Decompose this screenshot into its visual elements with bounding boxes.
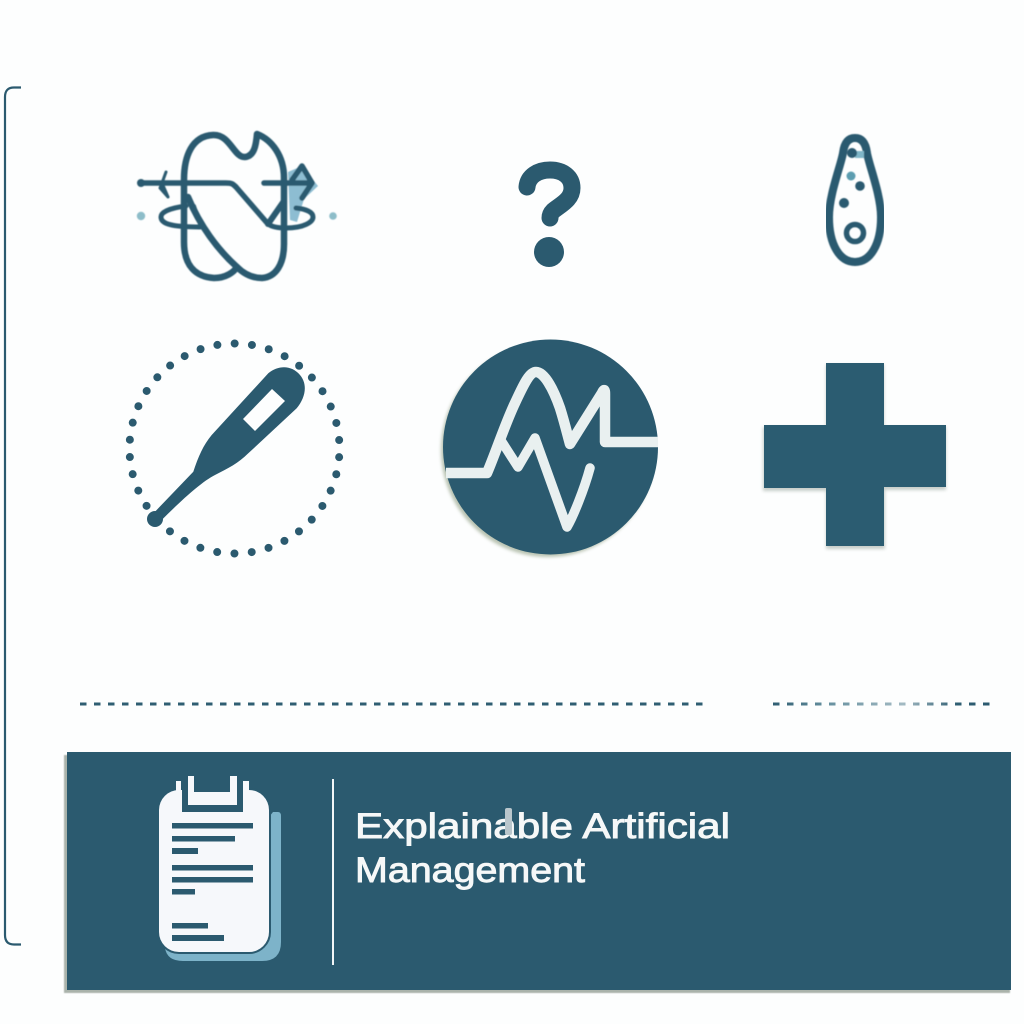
dotted divider left: [80, 702, 703, 706]
dotted ring: [130, 344, 340, 554]
icon: thermometer in dotted circle: [130, 344, 340, 554]
icon: tooth with arrow: [137, 134, 337, 278]
dotted divider right: [773, 702, 990, 706]
thermometer window: [243, 389, 285, 431]
thermometer bulb: [147, 511, 163, 527]
text artifact: [505, 808, 512, 835]
thermometer body: [155, 367, 305, 520]
left bracket: [5, 88, 21, 944]
banner heading: Management: [355, 851, 585, 890]
banner: [64, 752, 1011, 993]
banner divider: [332, 779, 334, 965]
icon: medical cross: [763, 363, 946, 549]
icon: question mark: [527, 170, 572, 267]
banner heading: Explainable Artificial: [355, 807, 730, 846]
icon: heartbeat circle: [441, 340, 658, 557]
heartbeat line: [446, 372, 658, 473]
icon: elongated drop with dots: [829, 138, 881, 262]
icon: clipboard document: [159, 776, 281, 961]
